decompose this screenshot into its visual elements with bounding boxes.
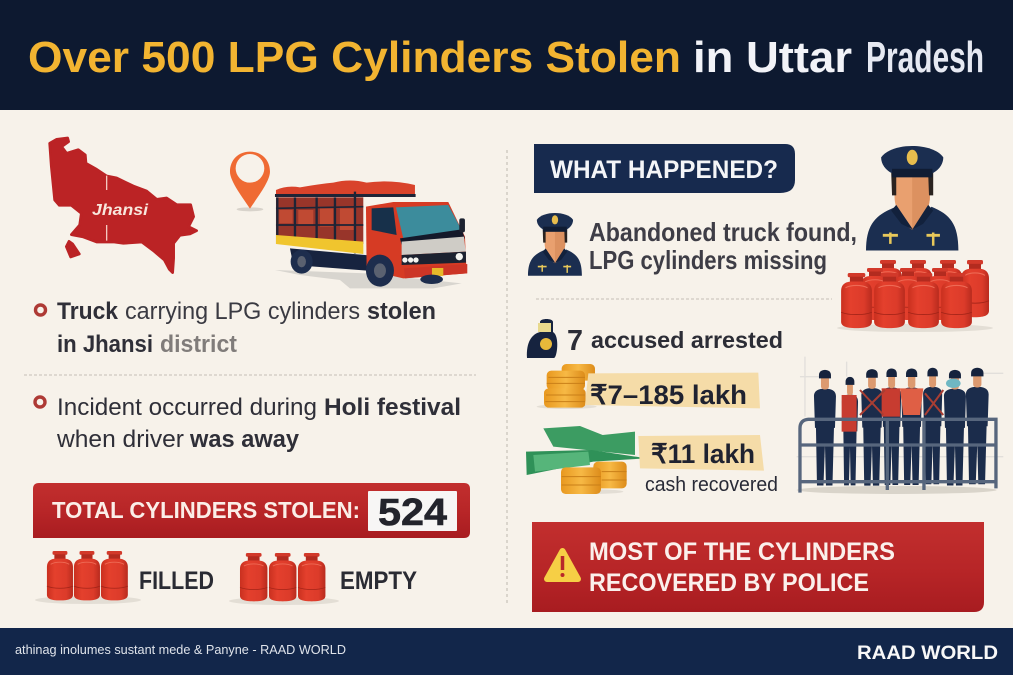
- empty cylinders: [229, 553, 417, 605]
- text: incident during Holi: Incident occurred during: [57, 394, 317, 421]
- illustration: large police officer: [866, 146, 958, 250]
- text: incident during Holi: when driver: [56, 426, 184, 453]
- illustration: red truck loaded with cylinders: [275, 180, 467, 288]
- text: truck stolen: [57, 298, 436, 358]
- map of Uttar Pradesh with Jhansi label: Jhansi: [92, 202, 149, 219]
- text: truck stolen: Truck: [57, 298, 119, 325]
- cash and amount recovered: [526, 426, 778, 496]
- icon: warning triangle: [547, 551, 578, 579]
- text: cash recovered: cash recovered: [645, 474, 778, 496]
- text: abandoned truck: [589, 217, 857, 275]
- empty cylinders: EMPTY: [340, 567, 417, 595]
- total cylinders stolen bar: [33, 483, 470, 538]
- callout: most cylinders recovered: RECOVERED BY POLICE: [589, 569, 869, 597]
- callout: most cylinders recovered: [532, 522, 984, 612]
- total cylinders stolen bar: TOTAL CYLINDERS STOLEN:: [52, 497, 360, 523]
- gold coins and amount: [537, 364, 760, 410]
- total cylinders stolen bar: 524: [378, 492, 447, 534]
- map of Uttar Pradesh with Jhansi label: [50, 138, 197, 273]
- filled cylinders: FILLED: [139, 567, 214, 595]
- cash and amount recovered: ₹11 lakh: [651, 439, 755, 469]
- text: incident during Holi: Holi festival: [324, 394, 461, 421]
- text: truck stolen: in Jhansi: [57, 331, 153, 358]
- icon: small police officer: [528, 213, 582, 276]
- header band: [0, 0, 1013, 110]
- icon: masked accused: [527, 319, 557, 358]
- text: truck stolen: stolen: [367, 298, 436, 325]
- gold coins and amount: ₹7–185 lakh: [590, 380, 747, 410]
- bullet: incident during Holi: [35, 394, 461, 453]
- footer brand: RAAD WORLD: [857, 643, 998, 664]
- footer band: [0, 628, 1013, 675]
- illustration: stack of cylinders: [837, 260, 993, 332]
- text: incident during Holi: [56, 394, 461, 453]
- text: incident during Holi: was away: [189, 426, 300, 453]
- footer band: athinag inolumes sustant mede & Panyne - RAAD WORLD: [15, 643, 346, 657]
- text: truck stolen: carrying LPG cylinders: [125, 298, 360, 325]
- bullet: truck stolen: [36, 298, 436, 358]
- heading: what happened: [534, 144, 795, 193]
- callout: most cylinders recovered: MOST OF THE CYLINDERS: [589, 538, 895, 566]
- title: Over 500 LPG Cylinders Stolen: [28, 33, 681, 82]
- text: 7 accused arrested: accused arrested: [591, 327, 783, 353]
- text: truck stolen: district: [160, 331, 237, 358]
- illustration: arrested men behind railing: [797, 357, 1003, 494]
- icon: location pin: [230, 152, 270, 211]
- text: abandoned truck: LPG cylinders missing: [589, 245, 827, 275]
- title: [28, 33, 984, 82]
- text: 7 accused arrested: 7: [567, 325, 583, 357]
- heading: what happened: WHAT HAPPENED?: [550, 156, 778, 184]
- filled cylinders: [35, 551, 214, 604]
- text: abandoned truck: Abandoned truck found,: [589, 217, 857, 247]
- title: in Uttar: [693, 33, 852, 82]
